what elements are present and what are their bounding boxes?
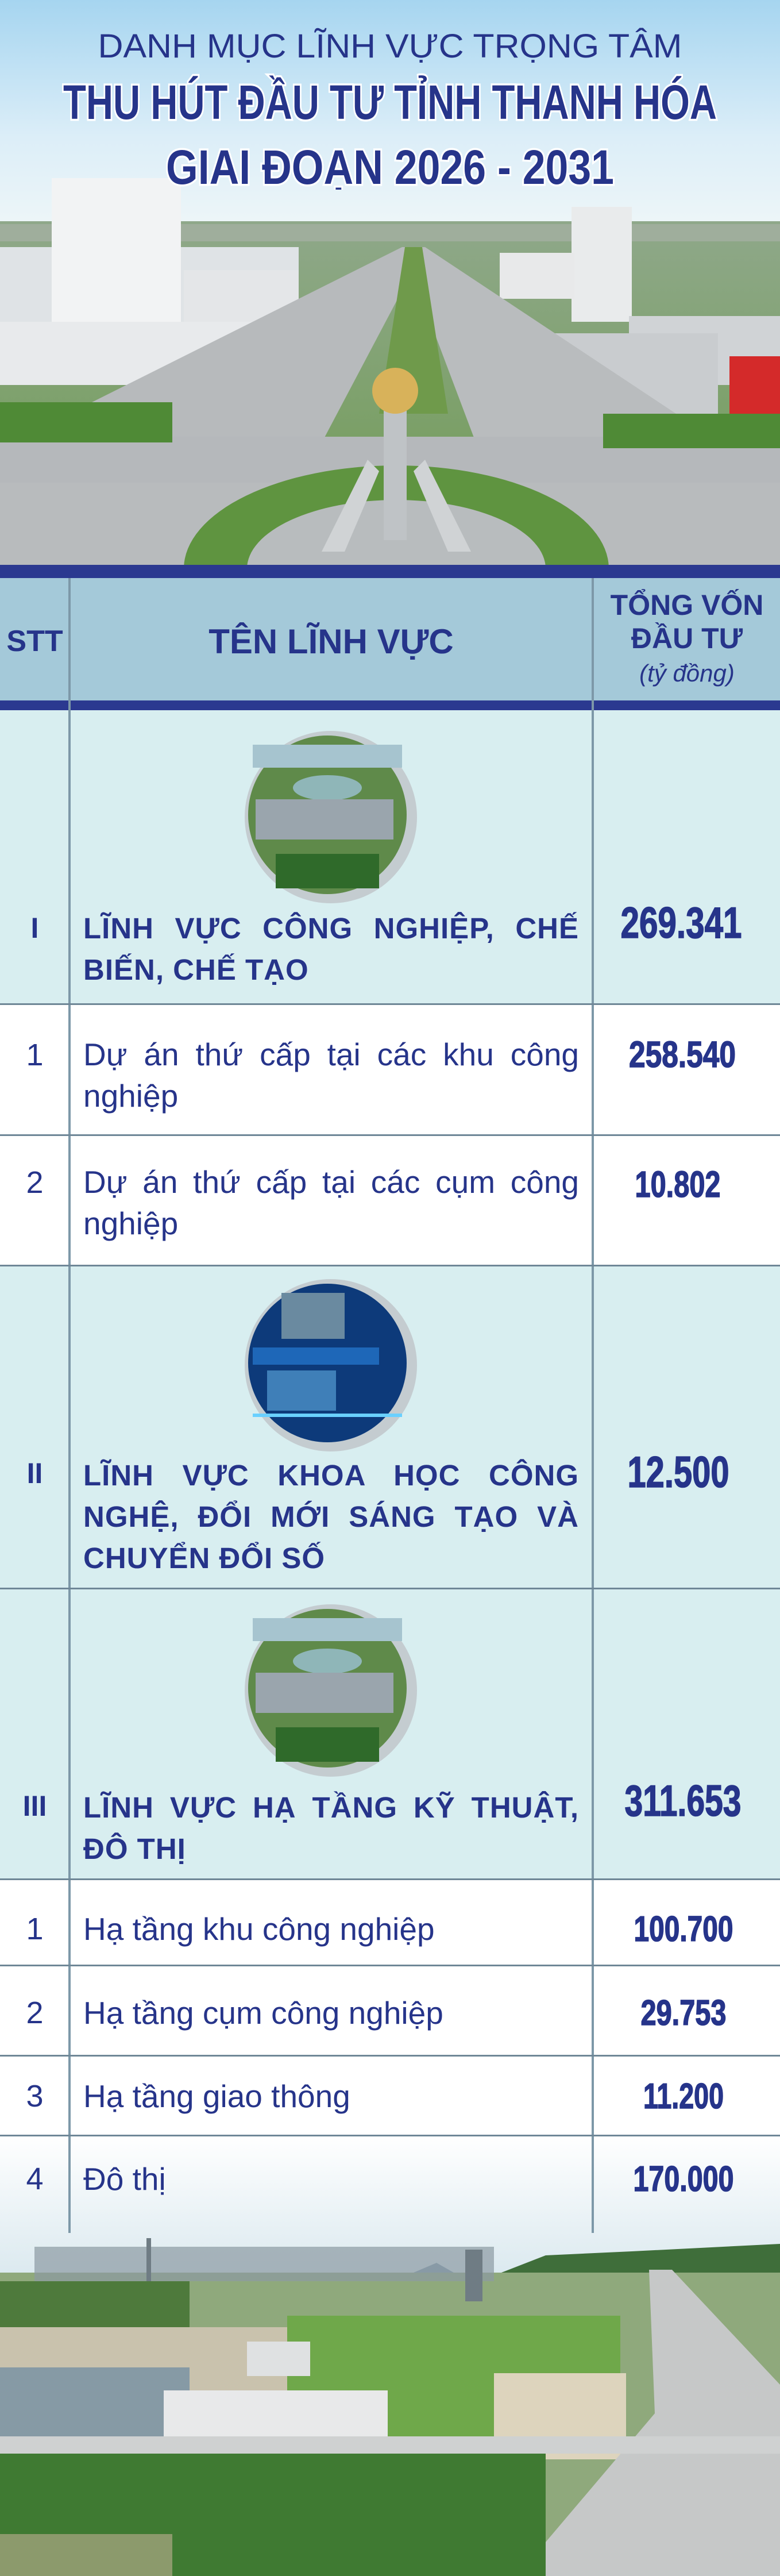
bottom photo: industrial zone: [0, 2166, 780, 2576]
table header row: TỔNG VỐN: [611, 589, 763, 621]
row 2: Dự án thứ cấp tại các cụm công nghiệp: [83, 1164, 579, 1241]
table header row: (tỷ đồng): [639, 660, 735, 687]
row II: science & technology: II: [27, 1457, 43, 1489]
icon: industrial park circle photo: [245, 731, 417, 903]
row 1: [26, 1034, 736, 1114]
header photo: city roundabout: [0, 0, 780, 565]
icon: technology circle: [245, 1279, 417, 1451]
row III.2: Hạ tầng cụm công nghiệp: [83, 1995, 443, 2031]
row 2: 10.802: [635, 1164, 720, 1205]
row III.2: [26, 1993, 726, 2033]
row III.1: 100.700: [634, 1909, 733, 1949]
row III: infrastructure: 311.653: [625, 1777, 741, 1826]
row III.3: 3: [26, 2079, 44, 2113]
row 1: 258.540: [629, 1034, 736, 1075]
row 2: 2: [26, 1165, 44, 1200]
subtitle line: DANH MỤC LĨNH VỰC TRỌNG TÂM: [98, 28, 682, 65]
row III.3: 11.200: [643, 2077, 724, 2116]
row III.1: [26, 1909, 733, 1949]
table header row: ĐẦU TƯ: [631, 622, 743, 654]
row II: science & technology: [27, 1279, 729, 1574]
row I: industry: [31, 731, 742, 986]
row III: infrastructure: [23, 1604, 741, 1865]
row I: industry: LĨNH VỰC CÔNG NGHIỆP, CHẾ BIẾN, CHẾ TẠO: [83, 912, 579, 986]
row III.4: [26, 2159, 734, 2199]
row 1: 1: [26, 1038, 44, 1072]
title: [62, 28, 718, 190]
row II: science & technology: 12.500: [627, 1448, 729, 1497]
icon: infrastructure circle photo: [245, 1604, 417, 1777]
row 1: Dự án thứ cấp tại các khu công nghiệp: [83, 1037, 579, 1114]
row III.3: [26, 2077, 724, 2116]
row III.2: 29.753: [641, 1993, 726, 2033]
table header row: [0, 578, 780, 700]
row III.1: 1: [26, 1912, 44, 1946]
row III.3: Hạ tầng giao thông: [83, 2078, 350, 2114]
row III.4: 170.000: [633, 2159, 734, 2199]
row III.4: Đô thị: [83, 2161, 166, 2197]
table header row: TÊN LĨNH VỰC: [208, 622, 454, 661]
row I: industry: 269.341: [620, 899, 742, 948]
row III.1: Hạ tầng khu công nghiệp: [83, 1911, 435, 1947]
row III.2: 2: [26, 1996, 44, 2030]
row I: industry: I: [31, 912, 38, 944]
row III: infrastructure: III: [23, 1790, 47, 1822]
table header row: STT: [6, 625, 63, 658]
row III.4: 4: [26, 2162, 44, 2196]
row III: infrastructure: LĨNH VỰC HẠ TẦNG KỸ THUẬT, ĐÔ THỊ: [83, 1791, 579, 1865]
row II: science & technology: LĨNH VỰC KHOA HỌC CÔNG NGHỆ, ĐỔI MỚI SÁNG TẠO VÀ CHUYỂN ĐỔI SỐ: [83, 1459, 579, 1574]
